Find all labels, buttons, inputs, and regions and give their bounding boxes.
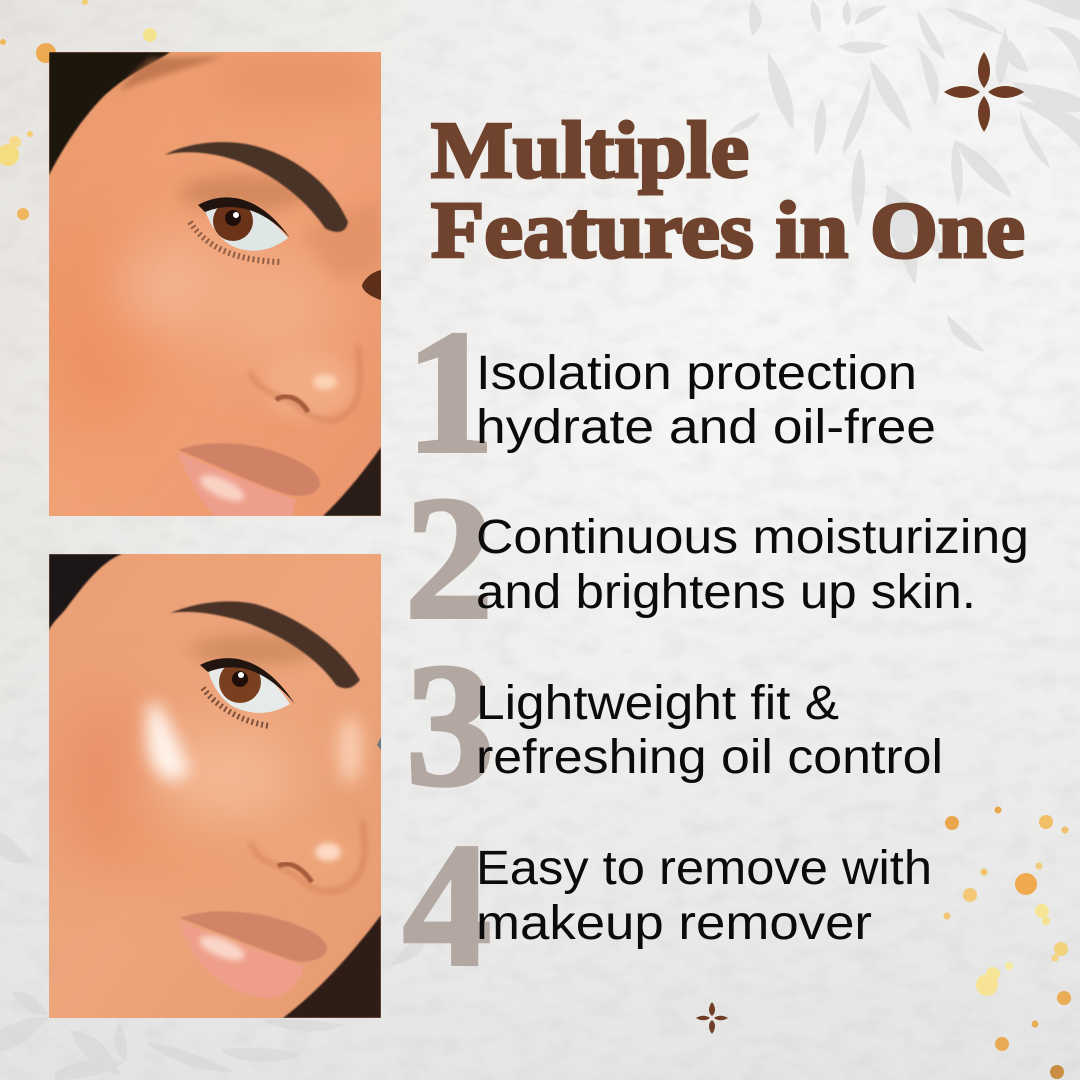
feature 3 text (476, 677, 943, 784)
hair (49, 52, 170, 175)
title: Features in One (431, 185, 1025, 275)
feature 4 text: Easy to remove with (476, 842, 932, 895)
eye (208, 668, 290, 713)
feature 1 (406, 295, 936, 490)
eye shadow (180, 175, 310, 211)
gold splatter, bottom right (944, 806, 1071, 1079)
numeral 4: 4 (403, 808, 491, 1003)
title: Multiple (431, 105, 749, 195)
title (431, 105, 1025, 275)
faded leaves, top right (728, 0, 1080, 352)
feature 1 text: hydrate and oil-free (476, 401, 936, 454)
hair (49, 554, 122, 630)
cheek blush (49, 232, 162, 434)
photo: after, glowing skin (49, 554, 381, 1018)
icon: four petal flower, top (944, 52, 1024, 132)
icon: four petal flower, bottom (696, 1002, 728, 1034)
feature 2 text: Continuous moisturizing (476, 511, 1029, 564)
feature 2 text: and brightens up skin. (476, 566, 976, 619)
nose (264, 351, 356, 419)
eye shadow (190, 634, 320, 666)
gold splatter, top left (0, 0, 157, 220)
feature 4 text (476, 842, 932, 950)
feature 3 text: Lightweight fit & (476, 677, 839, 730)
feature 1 text (476, 347, 936, 454)
faded leaves, bottom left (0, 832, 430, 1080)
lips (180, 911, 327, 962)
eyebrow (170, 601, 360, 688)
feature 3 text: refreshing oil control (476, 731, 943, 784)
feature 1 text: Isolation protection (476, 347, 917, 400)
feature 3 (406, 628, 943, 823)
nose (264, 823, 360, 887)
feature 4 text: makeup remover (476, 897, 872, 950)
second eye at edge (362, 270, 381, 300)
feature 2 (405, 461, 1029, 656)
feature 4 (403, 808, 932, 1003)
second eye at edge (377, 737, 381, 750)
numeral 2: 2 (405, 461, 493, 656)
hairline wisps (118, 56, 225, 92)
numeral 1: 1 (406, 295, 494, 490)
photo: before, matte skin (40, 50, 390, 516)
cheek highlight (146, 700, 190, 781)
eye (206, 208, 288, 251)
feature 2 text (476, 511, 1029, 619)
eyebrow (165, 142, 348, 232)
cheek blush (54, 706, 148, 851)
numeral 3: 3 (406, 628, 494, 823)
lips (178, 443, 320, 496)
